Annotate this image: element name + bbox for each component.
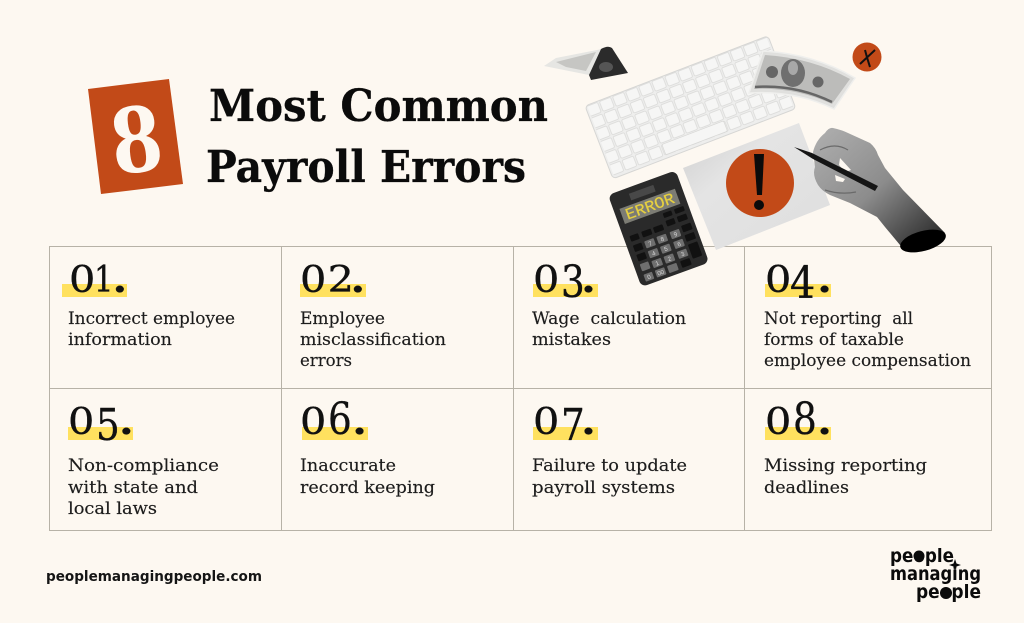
footer url: peoplemanagingpeople.com: [46, 569, 262, 585]
item numbers: 3: [561, 256, 585, 308]
item labels: record keeping: [300, 478, 435, 497]
item labels: deadlines: [764, 478, 849, 497]
item labels: Not reporting all: [764, 309, 913, 328]
item numbers: 0 .: [765, 402, 832, 443]
icon: banknote: [749, 51, 855, 109]
title: Payroll Errors: [206, 142, 526, 193]
logo: people: [890, 545, 954, 567]
icon: hand holding pen: [794, 128, 948, 257]
icon: calculator: 7: [648, 241, 654, 248]
highlight bars: [62, 284, 831, 440]
item labels: Missing reporting: [764, 456, 927, 475]
item labels: information: [68, 330, 172, 349]
item labels: Inaccurate: [300, 456, 396, 475]
icon: paper with exclamation: [683, 123, 830, 250]
badge: number 8: 8: [104, 80, 168, 197]
item numbers: 0 .: [300, 402, 367, 443]
item numbers: 0 .: [533, 260, 596, 301]
item numbers: 4: [790, 257, 815, 309]
badge: number 8: [88, 79, 183, 197]
item numbers: 0 .: [69, 260, 127, 301]
icon: x circle: [852, 42, 882, 72]
logo: [890, 545, 981, 603]
icon: calculator: 2: [667, 256, 673, 263]
item labels: [68, 309, 971, 518]
logo: managing: [890, 563, 981, 585]
item numbers: 7: [561, 399, 585, 451]
item labels: forms of taxable: [764, 330, 904, 349]
logo: people: [916, 581, 981, 603]
item labels: Incorrect employee: [68, 309, 235, 328]
icon: calculator: 9: [673, 232, 679, 239]
item numbers: 8: [793, 393, 817, 445]
item numbers: 6: [328, 393, 352, 445]
icon: calculator: 5: [664, 246, 669, 253]
item numbers: 1: [94, 259, 113, 301]
table grid: [49, 246, 992, 530]
item labels: employee compensation: [764, 351, 971, 370]
icon: calculator: 0: [647, 274, 653, 281]
item numbers: 0 .: [765, 260, 832, 301]
item labels: Employee: [300, 309, 385, 328]
icon: calculator: ERROR: [623, 190, 678, 224]
item numbers: 0 .: [68, 402, 134, 443]
icon: calculator: [608, 170, 709, 287]
icon: folded banknote: [544, 47, 628, 80]
item labels: Failure to update: [532, 456, 687, 475]
item labels: payroll systems: [532, 478, 675, 497]
item labels: errors: [300, 351, 352, 370]
icon: calculator: 00: [657, 269, 666, 278]
icon: keyboard: [585, 36, 796, 179]
item labels: Non-compliance: [68, 456, 219, 475]
item labels: Wage calculation: [532, 309, 686, 328]
item numbers: 5: [96, 399, 120, 451]
icon: calculator: 3: [680, 251, 686, 258]
item labels: local laws: [68, 499, 157, 518]
icon: calculator: 6: [677, 241, 683, 248]
item labels: mistakes: [532, 330, 611, 349]
icon: calculator: 4: [651, 251, 657, 258]
item labels: misclassification: [300, 330, 446, 349]
title: [206, 81, 548, 193]
item numbers: 02.: [300, 260, 365, 301]
item labels: with state and: [68, 478, 198, 497]
icon: calculator: 1: [655, 261, 661, 268]
item numbers: [68, 256, 832, 451]
icon: calculator: 8: [660, 236, 666, 243]
item numbers: 0 .: [533, 402, 596, 443]
title: Most Common: [209, 81, 548, 132]
